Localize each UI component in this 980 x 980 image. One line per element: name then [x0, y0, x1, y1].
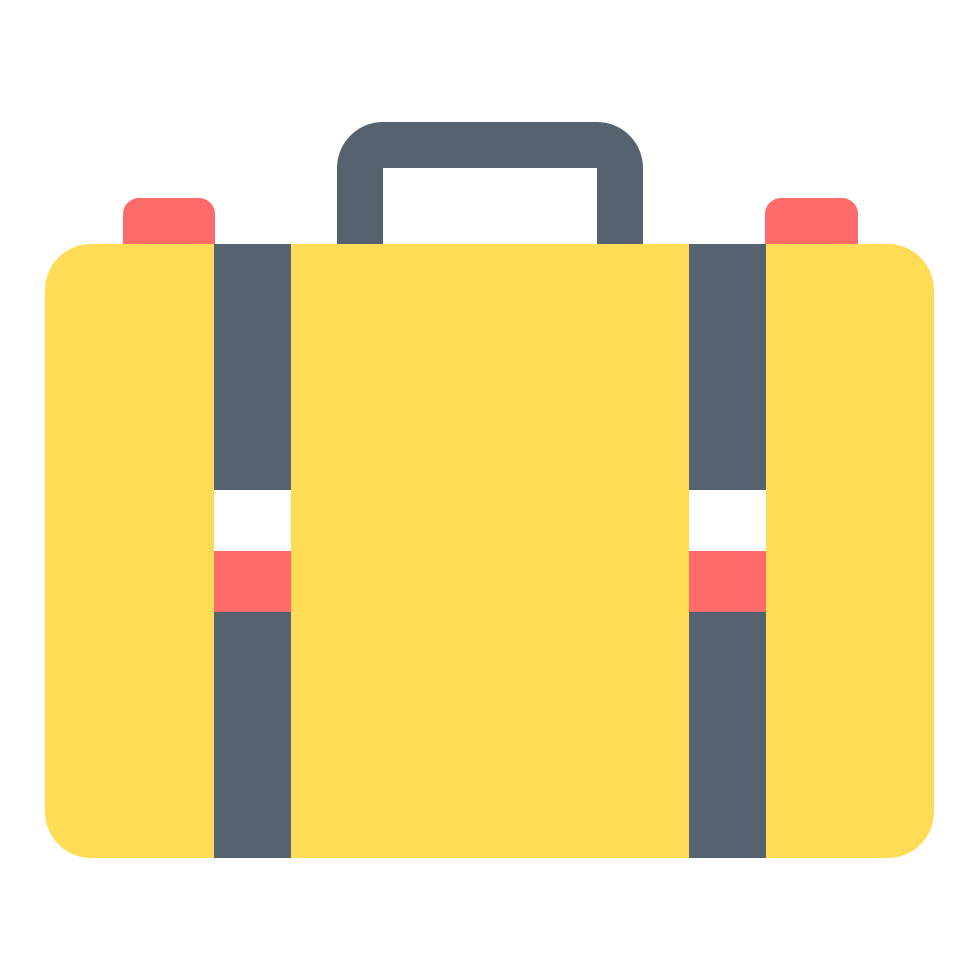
icon: right red latch	[765, 198, 858, 245]
left strap	[214, 244, 291, 858]
suitcase body	[45, 244, 934, 858]
right strap	[689, 244, 766, 858]
icon: left red latch	[123, 198, 215, 245]
icon: handle	[337, 122, 643, 245]
